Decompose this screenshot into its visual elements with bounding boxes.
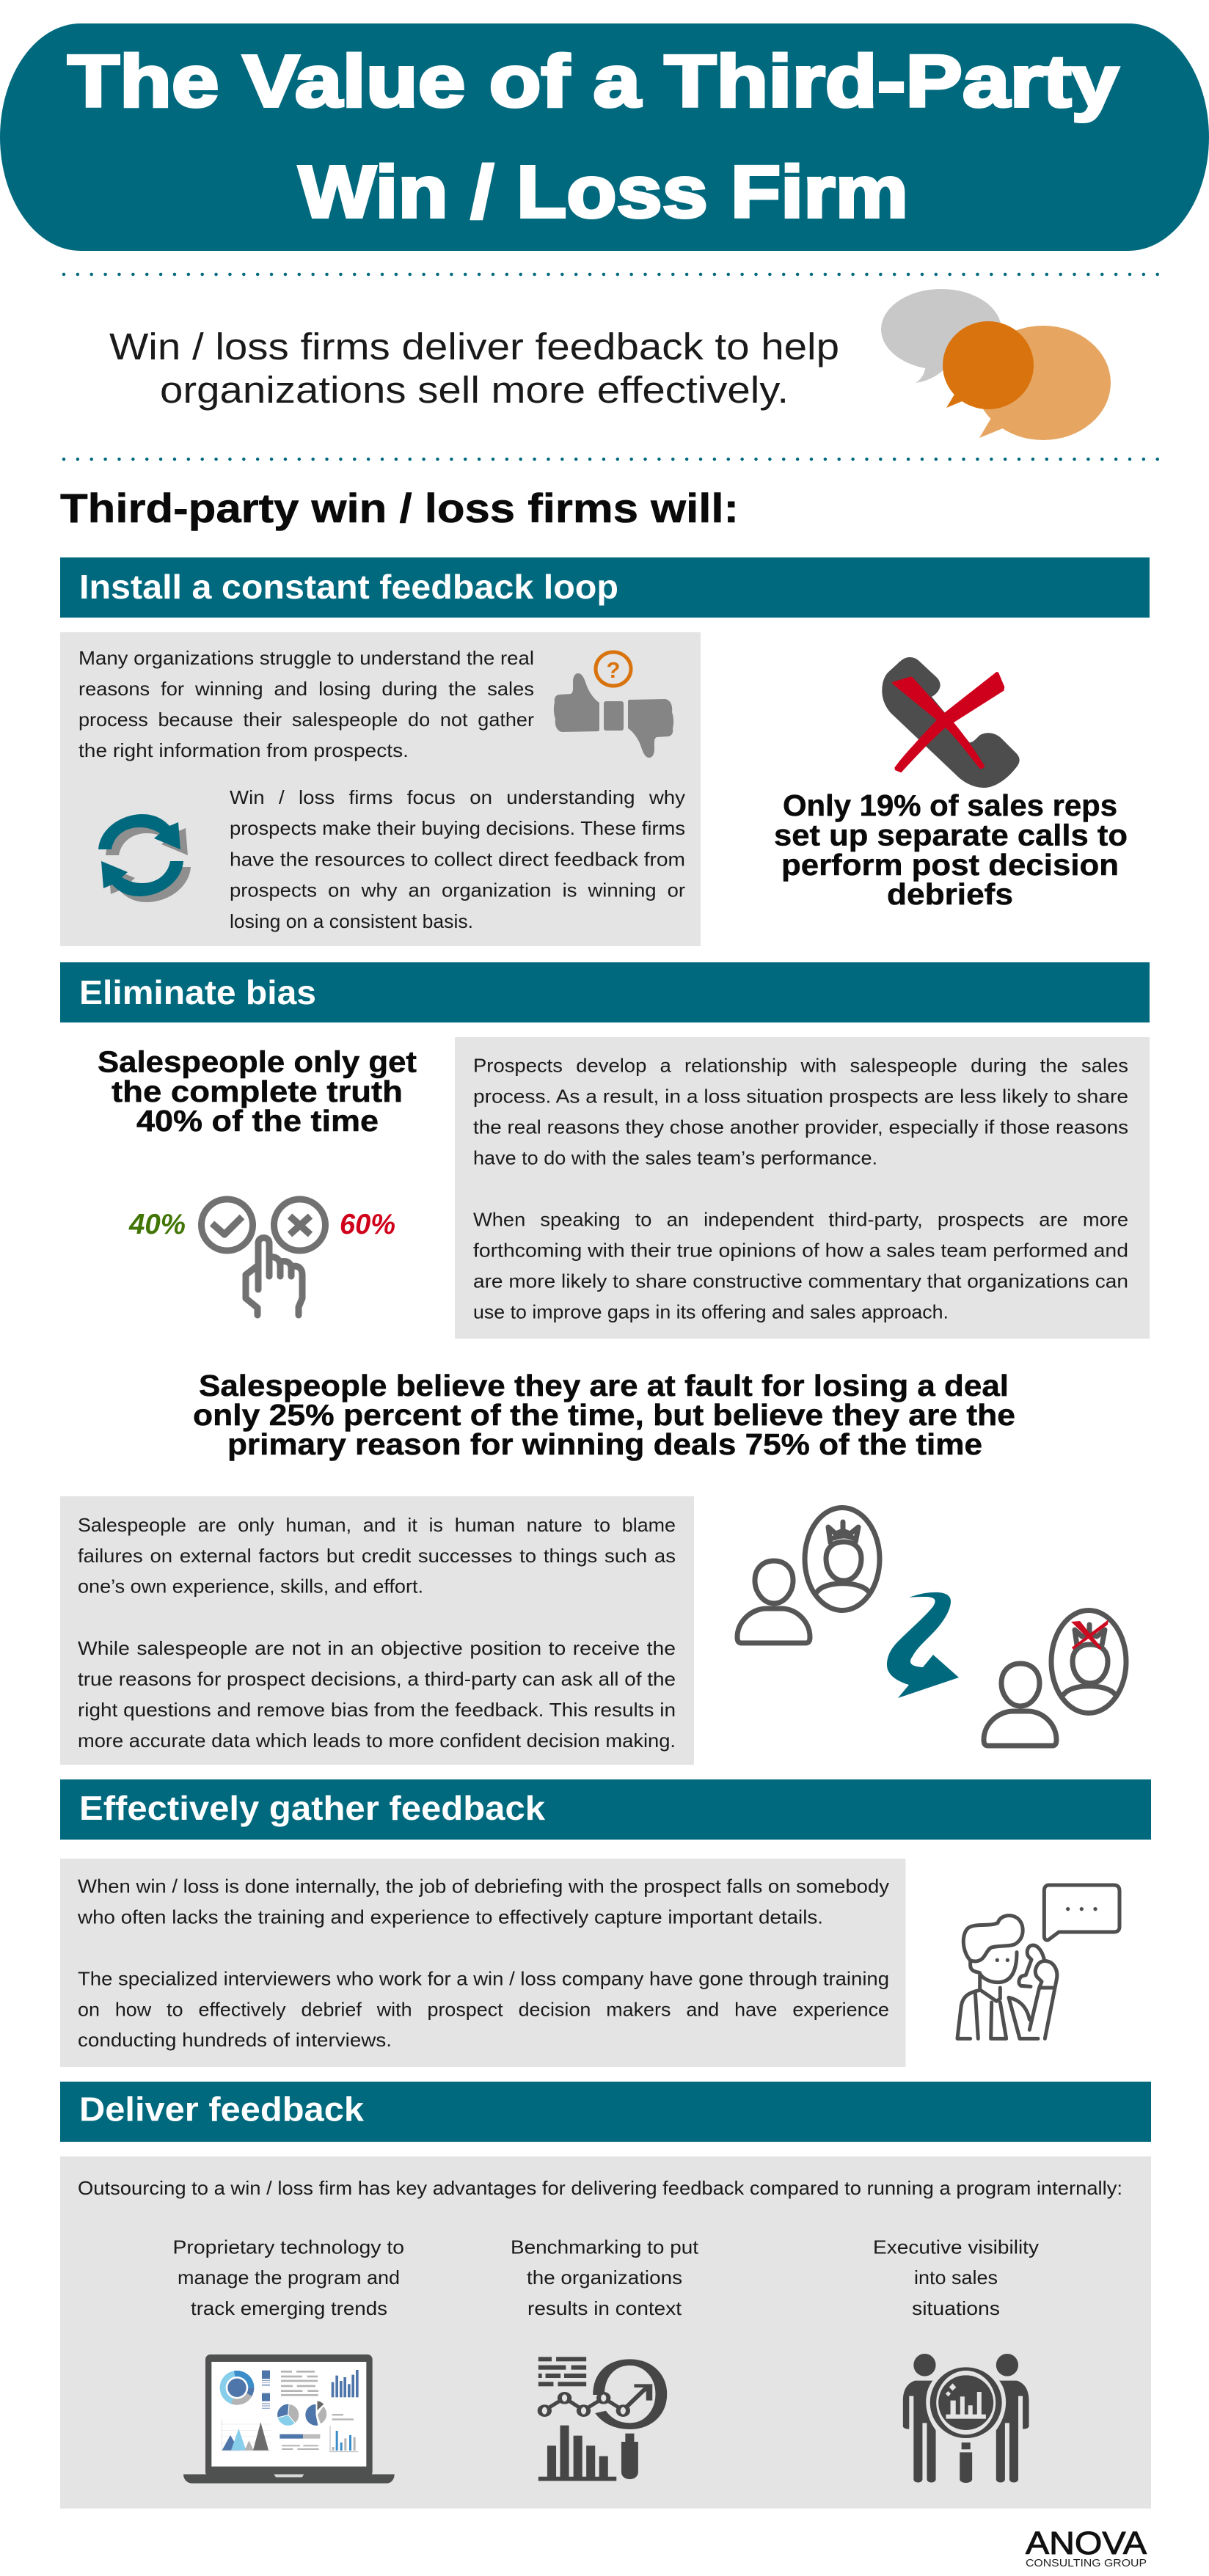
title banner: The Value of a Third-Party [67, 40, 1119, 122]
text block: firms focus: Win / loss firms focus on understanding why [230, 786, 685, 808]
text block: firms focus [230, 786, 685, 932]
icon: speech bubbles [881, 289, 1111, 440]
panel: internal debriefing: on how to effectively debrief with prospect decision makers and have experience [78, 1998, 889, 2020]
panel: salespeople are only human: failures on external factors but credit successes to things such as [78, 1545, 676, 1567]
panel: internal debriefing: The specialized interviewers who work for a win / loss company have gone through training [78, 1967, 889, 1989]
section header: effectively gather feedback: Effectively gather feedback [79, 1789, 545, 1827]
stat: salespeople believe: Salespeople believe they are at fault for losing a deal [199, 1369, 1009, 1402]
stat: complete truth: Salespeople only get [98, 1044, 417, 1078]
column text: benchmarking: the organizations [527, 2266, 682, 2288]
column text: proprietary technology: Proprietary technology to [173, 2236, 404, 2258]
panel: prospects develop a relationship [455, 1037, 1150, 1339]
text block: firms focus: prospects make their buying decisions. These firms [230, 817, 685, 839]
column text: executive visibility: into sales [914, 2266, 998, 2288]
panel: prospects develop a relationship: the real reasons they chose another provider, especially if those reasons [473, 1116, 1128, 1138]
stat: salespeople believe: primary reason for winning deals 75% of the time [227, 1427, 982, 1461]
section header: deliver feedback [60, 2082, 1151, 2142]
section header: effectively gather feedback [60, 1779, 1151, 1840]
icon: two people with magnifier [903, 2354, 1029, 2483]
icon: thumbs up and down with question mark: ? [607, 657, 620, 683]
stat: complete truth: 40% of the time [136, 1104, 379, 1138]
column text: benchmarking: results in context [527, 2297, 682, 2319]
column text: proprietary technology: track emerging trends [191, 2297, 387, 2319]
text block: firms focus: losing on a consistent basis. [230, 910, 473, 932]
section header: eliminate bias [60, 962, 1150, 1022]
stat: only 19 percent: set up separate calls to [774, 819, 1128, 852]
panel: internal debriefing: who often lacks the training and experience to effectively capture important details. [77, 1906, 823, 1928]
icon: circular arrows [98, 814, 191, 902]
panel: salespeople are only human: While salespeople are not in an objective position to receive the [78, 1637, 676, 1659]
panel: prospects develop a relationship: forthcoming with their true opinions of how a sales team performed and [473, 1240, 1128, 1262]
subtitle: organizations sell more effectively. [160, 369, 789, 411]
column text: proprietary technology: manage the program and [178, 2266, 400, 2288]
text block: organizations struggle: Many organizations struggle to understand the real [78, 647, 534, 669]
panel: feedback loop text [60, 632, 701, 946]
panel: prospects develop a relationship: When speaking to an independent third-party, prospects are more [473, 1209, 1128, 1231]
panel: prospects develop a relationship: use to improve gaps in its offering and sales approach. [473, 1301, 949, 1323]
text block: organizations struggle: reasons for winning and losing during the sales [78, 678, 534, 700]
column text: benchmarking: Benchmarking to put [511, 2236, 699, 2258]
intro text: Outsourcing to a win / loss firm has key advantages for delivering feedback compared to running a program internally: [78, 2177, 1122, 2199]
subtitle: Win / loss firms deliver feedback to help [109, 326, 839, 367]
title banner [0, 23, 1209, 251]
panel: internal debriefing [60, 1859, 905, 2067]
text block: organizations struggle: the right information from prospects. [78, 739, 409, 761]
panel: prospects develop a relationship: have to do with the sales team’s performance. [473, 1147, 877, 1169]
stat: only 19 percent: Only 19% of sales reps [783, 788, 1117, 822]
panel: salespeople are only human: one’s own experience, skills, and effort. [78, 1576, 423, 1598]
text block: organizations struggle [78, 647, 534, 761]
stat: only 19 percent [774, 788, 1128, 911]
panel: salespeople are only human: right questions and remove bias from the feedback. This results in [78, 1699, 676, 1721]
arrow: curved arrow [887, 1592, 959, 1698]
section header: deliver feedback: Deliver feedback [79, 2090, 364, 2129]
panel: salespeople are only human: more accurate data which leads to more confident decision making. [78, 1730, 676, 1752]
icon: laptop with dashboard [183, 2354, 395, 2484]
icon: interviewer on phone with speech bubble [957, 1885, 1119, 2038]
section header: install a constant feedback loop [60, 557, 1150, 618]
icon: hand choosing check or cross with percentages: 60% [340, 1209, 395, 1240]
stat: only 19 percent: debriefs [887, 877, 1013, 911]
heading: third-party firms will: Third-party win / loss firms will: [60, 485, 739, 531]
icon: analytics magnifier [538, 2357, 661, 2481]
icon: hand choosing check or cross with percentages: 40% [128, 1209, 186, 1240]
text block: firms focus: prospects on why an organization is winning or [230, 879, 685, 901]
column text: executive visibility: Executive visibility [873, 2236, 1039, 2258]
title banner: Win / Loss Firm [299, 151, 908, 233]
text block: firms focus: have the resources to collect direct feedback from [230, 848, 685, 870]
column text: benchmarking [511, 2236, 699, 2319]
column text: proprietary technology [173, 2236, 404, 2319]
section header: install a constant feedback loop: Install a constant feedback loop [79, 568, 618, 606]
icon: person with crowned self image [737, 1508, 880, 1643]
subtitle [109, 326, 839, 411]
column text: executive visibility: situations [912, 2297, 1000, 2319]
section header: eliminate bias: Eliminate bias [79, 973, 316, 1011]
panel: deliver feedback [60, 2156, 1151, 2509]
panel: salespeople are only human [60, 1496, 694, 1765]
icon: thumbs up and down with question mark [554, 652, 673, 758]
stat: salespeople believe [193, 1369, 1015, 1461]
stat: salespeople believe: only 25% percent of the time, but believe they are the [193, 1398, 1015, 1432]
stat: complete truth: the complete truth [112, 1075, 403, 1108]
icon: crossed out phone [882, 657, 1020, 788]
logo: Anova Consulting Group: ANOVA [1026, 2525, 1147, 2561]
column text: executive visibility [873, 2236, 1039, 2319]
panel: prospects develop a relationship: are more likely to share constructive commentary that organizations can [473, 1270, 1128, 1292]
stat: complete truth [98, 1044, 417, 1138]
icon: hand choosing check or cross with percentages [128, 1199, 395, 1315]
panel: prospects develop a relationship: Prospects develop a relationship with salespeople during the sales [473, 1055, 1128, 1077]
text block: organizations struggle: process because their salespeople do not gather [78, 709, 534, 731]
logo: Anova Consulting Group: CONSULTING GROUP [1026, 2557, 1147, 2569]
panel: internal debriefing: When win / loss is done internally, the job of debriefing with the prospect falls on somebody [78, 1875, 889, 1897]
panel: prospects develop a relationship: process. As a result, in a loss situation prospects are less likely to share [473, 1086, 1128, 1108]
stat: only 19 percent: perform post decision [781, 848, 1119, 882]
panel: salespeople are only human: true reasons for prospect decisions, a third-party can ask all of the [78, 1668, 676, 1690]
panel: internal debriefing: conducting hundreds of interviews. [78, 2029, 392, 2051]
icon: person with crossed out crown [984, 1611, 1126, 1746]
panel: salespeople are only human: Salespeople are only human, and it is human nature to blame [78, 1514, 676, 1536]
